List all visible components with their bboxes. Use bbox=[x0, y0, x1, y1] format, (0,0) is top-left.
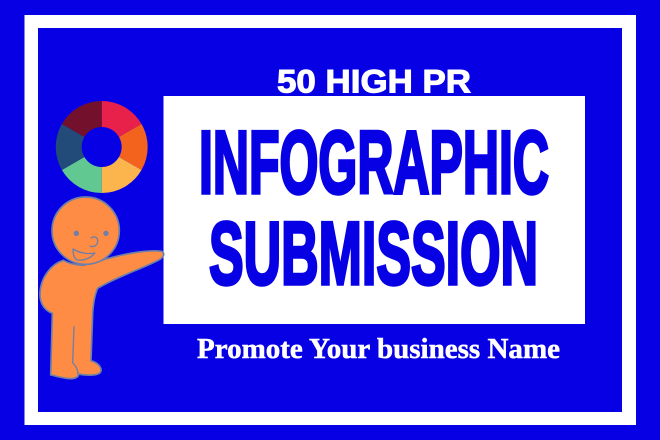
heading: 50 High PR: 50 HIGH PR bbox=[277, 64, 471, 100]
character inner leg line bbox=[73, 327, 78, 374]
character head bbox=[52, 197, 119, 264]
character smile bbox=[73, 249, 95, 260]
icon: pointing orange character bbox=[40, 197, 164, 379]
character left eye bbox=[74, 231, 79, 236]
character body and pointing arm bbox=[40, 251, 164, 379]
panel: white title box bbox=[164, 96, 585, 324]
tagline: Promote Your business Name bbox=[197, 334, 560, 365]
icon: colour wheel bbox=[56, 101, 148, 193]
character right eye bbox=[103, 231, 109, 236]
character nose bbox=[90, 237, 98, 247]
